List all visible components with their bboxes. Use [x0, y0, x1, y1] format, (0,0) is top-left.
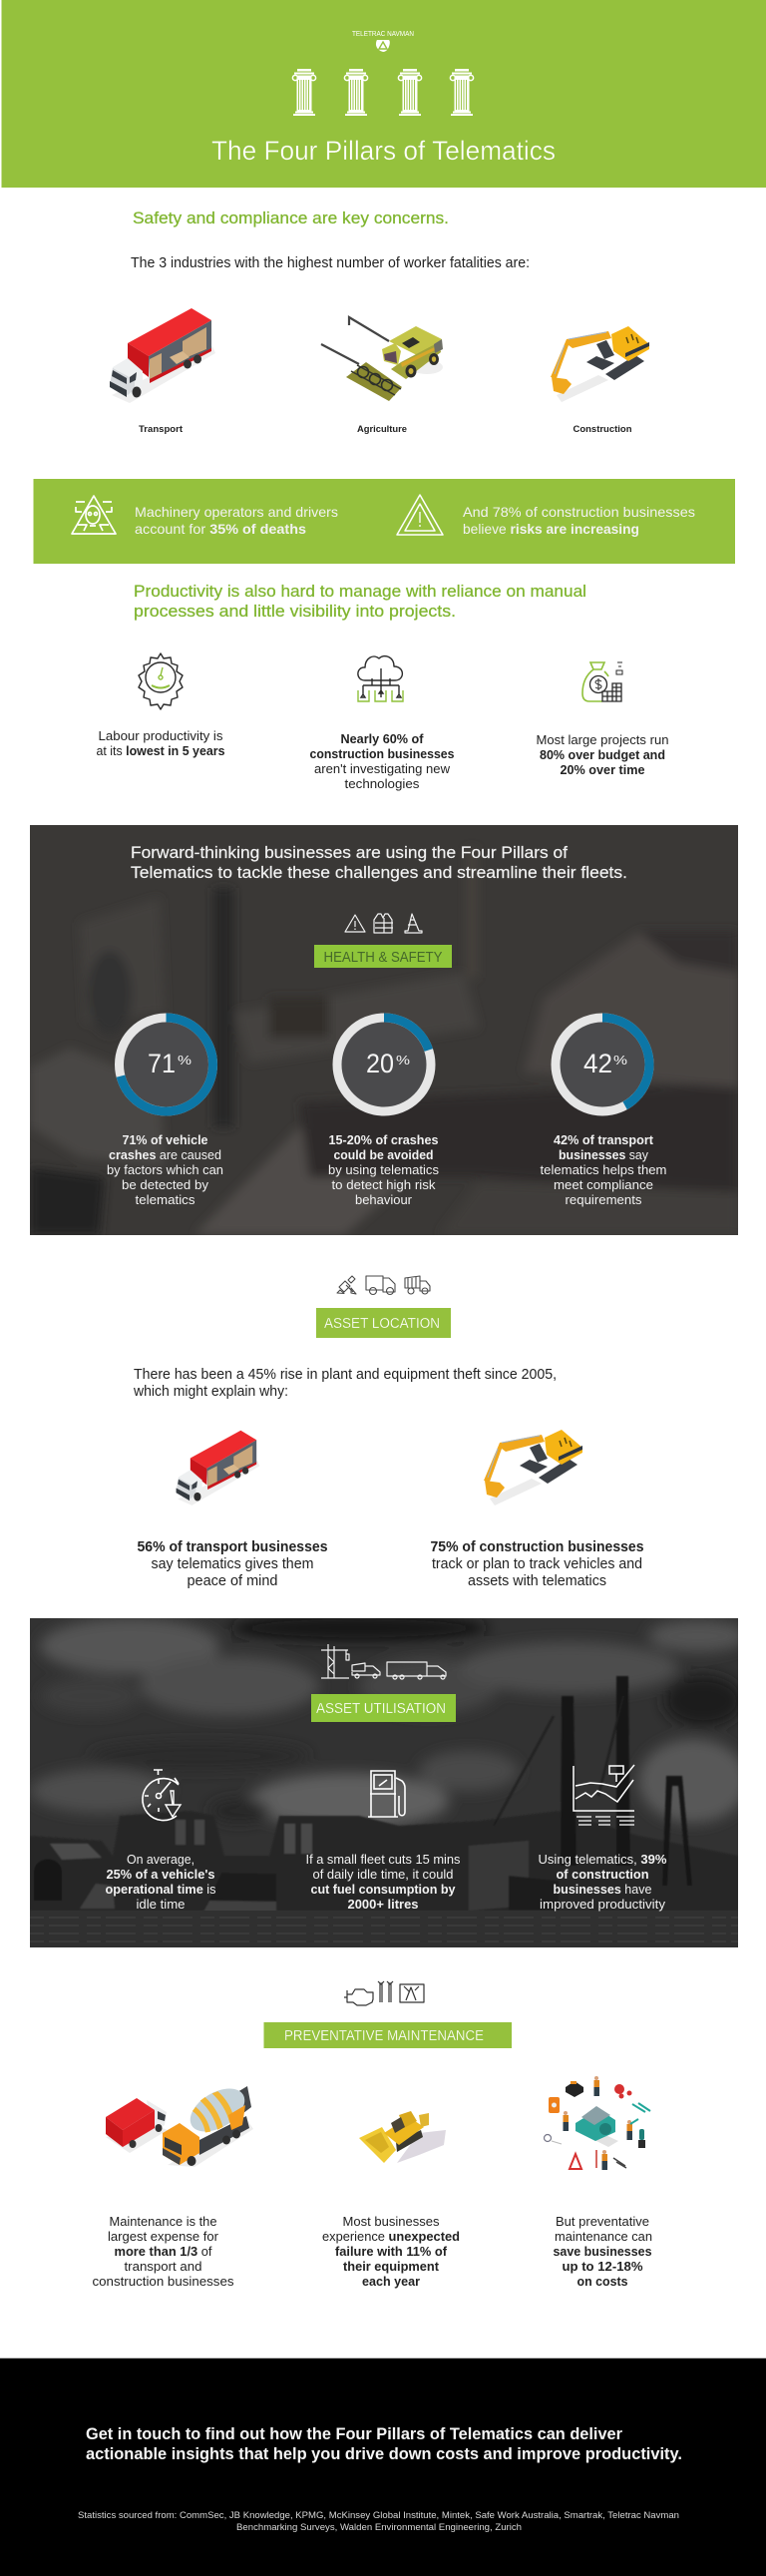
call to action: actionable insights that help you drive down costs and improve productivity. — [86, 2444, 682, 2463]
text: nearly 60%: Nearly 60% of — [341, 732, 424, 746]
text: rise in theft: There has been a 45% rise in plant and equipment theft since 2005, — [134, 1366, 557, 1383]
text: large projects: 80% over budget and — [540, 748, 665, 762]
caption: improved productivity: of construction — [557, 1868, 648, 1882]
text: nearly 60%: construction businesses — [309, 747, 455, 761]
badge: asset utilisation — [311, 1694, 456, 1722]
caption: 20%: to detect high risk — [331, 1178, 436, 1192]
badge: asset utilisation: ASSET UTILISATION — [316, 1700, 446, 1717]
caption: 75% of construction: track or plan to track vehicles and — [432, 1556, 642, 1572]
heading: safety and compliance: Safety and compliance are key concerns. — [133, 210, 449, 227]
text: labour productivity: Labour productivity is — [98, 729, 223, 743]
silhouettes — [30, 1676, 738, 1914]
icon: stopwatch — [143, 1770, 181, 1821]
caption: idle time: On average, — [127, 1853, 194, 1867]
section: preventative maintenance — [92, 1981, 652, 2289]
caption: fuel consumption: 2000+ litres — [347, 1898, 419, 1912]
badge: health and safety: HEALTH & SAFETY — [323, 949, 443, 966]
icon: skull hazard triangle — [72, 496, 116, 534]
heading: productivity: Productivity is also hard to manage with reliance on manual — [134, 583, 586, 601]
caption: 56% of transport — [138, 1539, 327, 1589]
badge: preventative maintenance: PREVENTATIVE MAINTENANCE — [284, 2027, 484, 2044]
text: construction risks: And 78% of construction businesses — [463, 504, 695, 520]
caption: 71%: by factors which can — [107, 1163, 223, 1177]
title: The Four Pillars of Telematics — [211, 136, 556, 166]
caption: unexpected failure: their equipment — [343, 2260, 440, 2274]
donut chart: 71% — [120, 1018, 213, 1111]
caption: unexpected failure: each year — [362, 2275, 420, 2289]
caption: savings — [553, 2215, 652, 2289]
icons: crane, dump truck, semi truck — [321, 1644, 446, 1679]
caption: improved productivity: Using telematics, 39% — [539, 1853, 666, 1867]
caption: improved productivity — [539, 1853, 666, 1912]
caption: unexpected failure: experience unexpected — [322, 2230, 460, 2244]
panel: health and safety — [30, 825, 738, 1235]
caption: 42%: 42% of transport — [554, 1133, 654, 1147]
background photo: trucks, darkened — [30, 825, 738, 1235]
text: large projects — [537, 733, 669, 777]
header banner — [2, 0, 766, 188]
caption: 56% of transport: 56% of transport businesses — [138, 1539, 327, 1555]
text: large projects: Most large projects run — [537, 733, 669, 747]
caption: largest expense: construction businesses — [92, 2275, 233, 2289]
caption: largest expense: more than 1/3 of — [114, 2245, 212, 2259]
caption: 20% — [328, 1133, 439, 1207]
text: machinery operators: Machinery operators and drivers — [135, 504, 338, 520]
text: the 3 industries: The 3 industries with the highest number of worker fatalities are: — [131, 254, 530, 271]
caption: savings: on costs — [576, 2275, 628, 2289]
caption: 71%: 71% of vehicle — [122, 1133, 208, 1147]
panel: green stats banner — [34, 479, 735, 564]
caption: 42%: meet compliance — [554, 1178, 653, 1192]
caption: savings: up to 12-18% — [563, 2260, 642, 2274]
icon: cloud download — [358, 656, 403, 701]
caption: 42%: telematics helps them — [541, 1163, 666, 1177]
text: labour productivity: at its lowest in 5 years — [96, 744, 225, 758]
text: nearly 60%: aren't investigating new — [314, 762, 451, 776]
caption: fuel consumption — [305, 1853, 461, 1912]
badge: asset location: ASSET LOCATION — [324, 1315, 440, 1332]
caption: 75% of construction — [431, 1539, 644, 1589]
section: asset location — [133, 1276, 644, 1589]
caption: largest expense: transport and — [124, 2260, 202, 2274]
illustration: maintenance workers and parts — [545, 2076, 650, 2170]
text: rise in theft — [133, 1366, 557, 1400]
icon: warning triangle — [397, 495, 443, 535]
caption: 42%: requirements — [565, 1193, 642, 1207]
donut chart: 20%: 20 — [366, 1049, 394, 1078]
donut chart: 42%: % — [613, 1053, 628, 1068]
caption: 20%: behaviour — [355, 1193, 412, 1207]
panel: asset utilisation — [30, 1614, 748, 1947]
caption: 20%: 15-20% of crashes — [329, 1133, 439, 1147]
sources: Statistics sourced from: CommSec, JB Knowledge, KPMG, McKinsey Global Institute, Mintek, Safe Work Australia, Smartrak, Teletrac Navman — [78, 2510, 679, 2521]
illustration: truck and cement mixer — [106, 2080, 253, 2167]
caption: 56% of transport: say telematics gives them — [152, 1556, 313, 1572]
label: construction: Construction — [573, 424, 632, 434]
text: large projects: 20% over time — [561, 763, 645, 777]
text: forward-thinking headline: Telematics to tackle these challenges and streamline their fleets. — [131, 863, 627, 882]
caption: 42%: businesses say — [559, 1148, 649, 1162]
icons: satellite, truck, dump truck — [337, 1276, 430, 1295]
label: transport: Transport — [139, 424, 183, 434]
caption: fuel consumption: of daily idle time, it could — [313, 1868, 454, 1882]
illustration: transport truck — [110, 308, 215, 403]
illustration: transport truck — [177, 1431, 259, 1505]
donut chart: 20%: % — [396, 1053, 411, 1068]
logo — [352, 29, 414, 52]
productivity row — [96, 653, 669, 791]
icon: gear gauge — [139, 653, 183, 709]
caption: largest expense — [92, 2215, 233, 2289]
badge: asset location — [316, 1308, 451, 1338]
badge: preventative maintenance — [263, 2022, 512, 2048]
logo: TELETRAC NAVMAN — [352, 29, 414, 38]
caption: 71%: telematics — [136, 1193, 195, 1207]
caption: unexpected failure: Most businesses — [343, 2215, 439, 2229]
caption: 42% — [541, 1133, 666, 1207]
label: agriculture: Agriculture — [357, 424, 407, 434]
illustration: excavator — [551, 326, 649, 402]
caption: unexpected failure — [322, 2215, 460, 2289]
industries row — [110, 308, 649, 434]
badge: health and safety — [314, 945, 452, 968]
donut chart: 42% — [556, 1018, 649, 1111]
caption: fuel consumption: cut fuel consumption by — [311, 1883, 456, 1897]
caption: largest expense: largest expense for — [108, 2230, 218, 2244]
background photo: machinery under clouds — [30, 1614, 748, 1947]
text: forward-thinking headline — [131, 843, 627, 882]
text: nearly 60%: technologies — [345, 777, 419, 791]
illustration: bulldozer — [359, 2111, 446, 2163]
text: forward-thinking headline: Forward-thinking businesses are using the Four Pillars of — [131, 843, 568, 862]
sources — [78, 2510, 679, 2533]
caption: largest expense: Maintenance is the — [110, 2215, 217, 2229]
icon: money bag — [582, 662, 622, 701]
caption: 71%: crashes are caused — [109, 1148, 221, 1162]
call to action: Get in touch to find out how the Four Pillars of Telematics can deliver — [86, 2424, 622, 2443]
caption: 75% of construction: assets with telematics — [468, 1573, 606, 1589]
icon: line chart with monitor — [574, 1765, 634, 1825]
call to action — [86, 2424, 682, 2463]
caption: 71% — [107, 1133, 223, 1207]
caption: unexpected failure: failure with 11% of — [335, 2245, 448, 2259]
caption: savings: maintenance can — [555, 2230, 652, 2244]
text: machinery operators: account for 35% of deaths — [135, 521, 306, 537]
caption: 56% of transport: peace of mind — [188, 1573, 277, 1589]
caption: idle time: 25% of a vehicle's — [106, 1868, 215, 1882]
illustration: combine harvester — [321, 317, 443, 401]
caption: savings: save businesses — [553, 2245, 652, 2259]
caption: improved productivity: improved productivity — [540, 1898, 666, 1912]
illustration: excavator — [484, 1430, 582, 1505]
text: labour productivity — [96, 729, 225, 758]
icon: fuel pump — [368, 1771, 405, 1817]
caption: idle time: idle time — [136, 1898, 186, 1912]
caption: idle time: operational time is — [106, 1883, 216, 1897]
caption: 20%: could be avoided — [333, 1148, 433, 1162]
heading: productivity — [134, 583, 586, 621]
caption: savings: But preventative — [556, 2215, 649, 2229]
text: construction risks — [463, 504, 695, 537]
donut chart: 42%: 42 — [583, 1049, 612, 1078]
heading: productivity: processes and little visibility into projects. — [134, 603, 456, 621]
caption: idle time — [106, 1853, 216, 1912]
donut chart: 20% — [337, 1018, 431, 1111]
text: rise in theft: which might explain why: — [133, 1383, 288, 1400]
donut chart: 71%: 71 — [148, 1049, 176, 1078]
icon: four pillars — [292, 69, 474, 116]
caption: 71%: be detected by — [122, 1178, 209, 1192]
icons: engine, wrenches, manual — [344, 1981, 424, 2005]
sources: Benchmarking Surveys, Walden Environmental Engineering, Zurich — [236, 2522, 522, 2533]
caption: fuel consumption: If a small fleet cuts 15 mins — [305, 1853, 461, 1867]
caption: 20%: by using telematics — [328, 1163, 439, 1177]
text: nearly 60% — [309, 732, 455, 791]
text: machinery operators — [135, 504, 338, 537]
text: construction risks: believe risks are increasing — [463, 521, 639, 537]
caption: 75% of construction: 75% of construction businesses — [431, 1539, 644, 1555]
icons: warning, vest, cone — [345, 914, 422, 933]
donut chart: 71%: % — [178, 1053, 192, 1068]
footer — [0, 2358, 766, 2576]
caption: improved productivity: businesses have — [553, 1883, 652, 1897]
